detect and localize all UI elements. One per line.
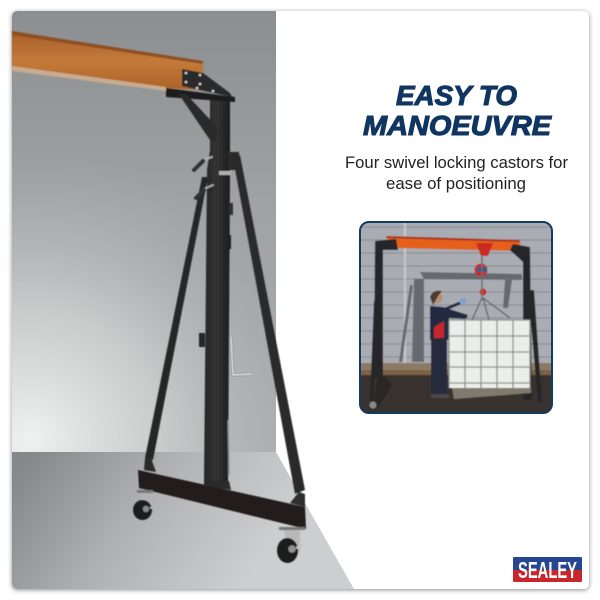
heading: MANOEUVRE xyxy=(363,110,552,141)
Sealey logo xyxy=(513,557,582,583)
base beam xyxy=(138,458,306,529)
heading: EASY TO xyxy=(396,80,517,111)
locking handles xyxy=(194,157,213,198)
gantry left leg xyxy=(370,239,398,408)
left caster xyxy=(133,490,157,520)
top bracket with bolts xyxy=(166,69,235,142)
gantry right leg xyxy=(510,244,542,402)
steel beam xyxy=(12,31,203,91)
panel: studio backdrop xyxy=(12,11,354,589)
inset photo: crane in use xyxy=(360,222,552,414)
description text: ease of positioning xyxy=(386,175,526,193)
left support strut xyxy=(145,177,208,460)
hoist xyxy=(472,243,510,320)
orange beam xyxy=(386,236,520,251)
man xyxy=(430,291,468,398)
IBC tank xyxy=(449,320,531,399)
winch crank handle xyxy=(231,337,251,375)
mast xyxy=(199,100,239,483)
description text: Four swivel locking castors for xyxy=(345,154,568,172)
description text xyxy=(345,154,568,193)
ratchet detail xyxy=(228,420,229,475)
right support strut xyxy=(233,155,305,494)
logo background xyxy=(513,557,582,582)
clad wall xyxy=(361,223,551,364)
crane shadow xyxy=(399,272,522,362)
heading xyxy=(363,80,552,141)
backdrop floor xyxy=(12,452,354,589)
right caster xyxy=(277,527,305,563)
backdrop wall xyxy=(12,11,276,452)
photo frame xyxy=(360,222,552,413)
product photo: gantry crane xyxy=(12,31,306,563)
brick strip and ground xyxy=(360,363,552,414)
